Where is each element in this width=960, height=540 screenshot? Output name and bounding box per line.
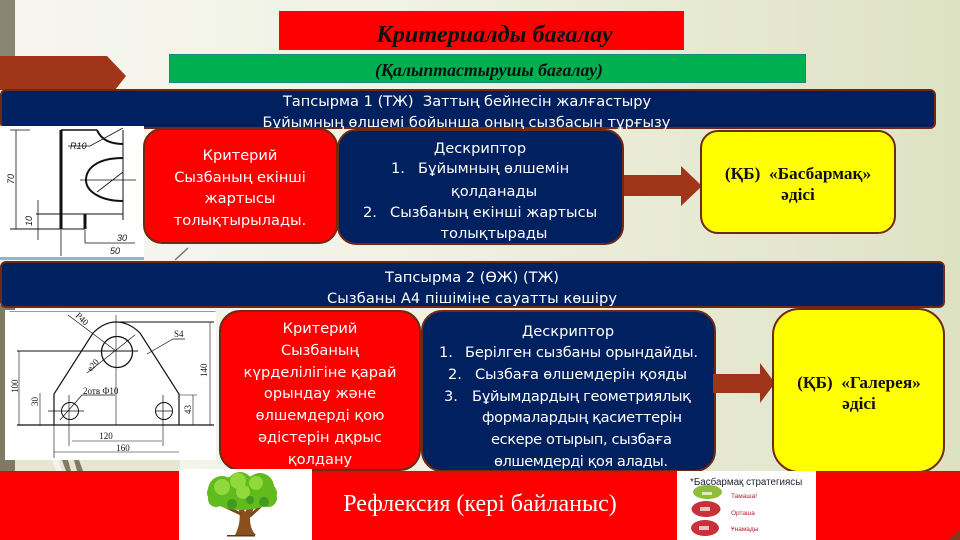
title: Критериалды бағалау (375, 21, 613, 48)
arrow 2 (713, 363, 775, 403)
criterion box 1: жартысы (205, 190, 275, 207)
criterion box 2: әдістерін дқрыс (258, 429, 382, 446)
image: thumbs strategy card: Орташа (731, 510, 755, 517)
image: technical drawing 2: 160 (116, 443, 130, 453)
descriptor box 1 (338, 130, 623, 244)
criterion box 2 (220, 311, 420, 470)
descriptor box 2: өлшемдерді қоя алады. (494, 453, 668, 470)
criterion box 1: толықтырылады. (174, 212, 306, 229)
image: technical drawing 1: 10 (24, 216, 34, 226)
task 1 bar: Тапсырма 1 (ТЖ) Заттың бейнесін жалғастыру (282, 93, 652, 110)
image: thumbs strategy card: Тамаша! (731, 493, 757, 500)
image: technical drawing 2: 43 (183, 404, 193, 414)
reflection footer band: Рефлексия (кері байланыс) (343, 491, 617, 517)
arrow 1 (624, 166, 702, 206)
descriptor box 1: Бұйымның өлшемін (418, 160, 569, 177)
method box 2: әдісі (842, 394, 876, 413)
decorative arrow tab (0, 56, 126, 90)
method box 2 (773, 309, 944, 472)
image: technical drawing 1: 50 (110, 246, 120, 256)
task 1 bar (1, 90, 935, 131)
descriptor box 2: Бұйымдардың геометриялық (472, 388, 691, 405)
method box 1: әдісі (781, 185, 815, 204)
image: technical drawing 1: 30 (117, 233, 127, 243)
image: technical drawing 2: 100 (10, 379, 20, 393)
criterion box 2: күрделілігіне қарай (244, 364, 396, 381)
descriptor box 1: қолданады (451, 183, 537, 200)
descriptor box 2: 3. (444, 388, 458, 405)
image: thumbs strategy card: *Басбармақ стратегиясы (690, 477, 802, 488)
method box 2: (ҚБ) «Галерея» (797, 373, 921, 392)
image: technical drawing 2: S4 (174, 329, 184, 339)
criterion box 2: орындау және (264, 385, 376, 402)
title (279, 11, 684, 50)
criterion box 1: Сызбаның екінші (174, 169, 306, 186)
criterion box 2: қолдану (288, 451, 352, 468)
image: technical drawing 1: R10 (70, 141, 87, 151)
task 1 bar: Бұйымның өлшемі бойынша оның сызбасын тұрғызу (263, 114, 671, 131)
image: technical drawing 1 (0, 126, 144, 260)
image: tree (179, 469, 312, 540)
task 2 bar: Тапсырма 2 (ӨЖ) (ТЖ) (384, 269, 559, 286)
descriptor box 1: толықтырады (441, 225, 547, 242)
descriptor box 1: Сызбаның екінші жартысы (390, 204, 597, 221)
method box 1 (701, 131, 895, 233)
image: technical drawing 2 (5, 310, 216, 460)
descriptor box 1: 1. (391, 160, 405, 177)
descriptor box 2 (422, 311, 715, 471)
image: technical drawing 2: 140 (199, 363, 209, 377)
criterion box 1 (144, 129, 337, 243)
descriptor box 2: Сызбаға өлшемдерін қояды (475, 366, 687, 383)
descriptor box 2: Берілген сызбаны орындайды. (465, 344, 698, 361)
descriptor box 1: 2. (363, 204, 377, 221)
descriptor box 2: формалардың қасиеттерін (482, 409, 682, 426)
reflection footer band (0, 471, 960, 540)
subtitle banner: (Қалыптастырушы бағалау) (375, 60, 603, 81)
criterion box 1: Критерий (203, 147, 277, 164)
criterion box 2: Сызбаның (281, 342, 359, 359)
subtitle banner (170, 54, 806, 82)
image: technical drawing 2: Р40 (74, 310, 91, 328)
criterion box 2: Критерий (283, 320, 357, 337)
image: technical drawing 2: 2отв Ф10 (83, 386, 119, 396)
method box 1: (ҚБ) «Басбармақ» (725, 164, 871, 183)
descriptor box 2: 1. (439, 344, 453, 361)
image: technical drawing 2: 30 (30, 396, 40, 406)
descriptor box 2: Дескриптор (522, 323, 614, 340)
task 2 bar (1, 262, 944, 307)
image: thumbs strategy card (677, 471, 816, 540)
image: technical drawing 2: е20 (85, 357, 101, 373)
image: technical drawing 1: 70 (6, 174, 16, 184)
image: thumbs strategy card: Ұнамады (731, 526, 759, 533)
descriptor box 2: ескере отырып, сызбаға (491, 431, 672, 448)
image: technical drawing 2: 120 (99, 431, 113, 441)
descriptor box 1: Дескриптор (434, 140, 526, 157)
criterion box 2: өлшемдерді қою (256, 407, 384, 424)
descriptor box 2: 2. (448, 366, 462, 383)
task 2 bar: Сызбаны А4 пішіміне сауатты көшіру (327, 290, 617, 307)
